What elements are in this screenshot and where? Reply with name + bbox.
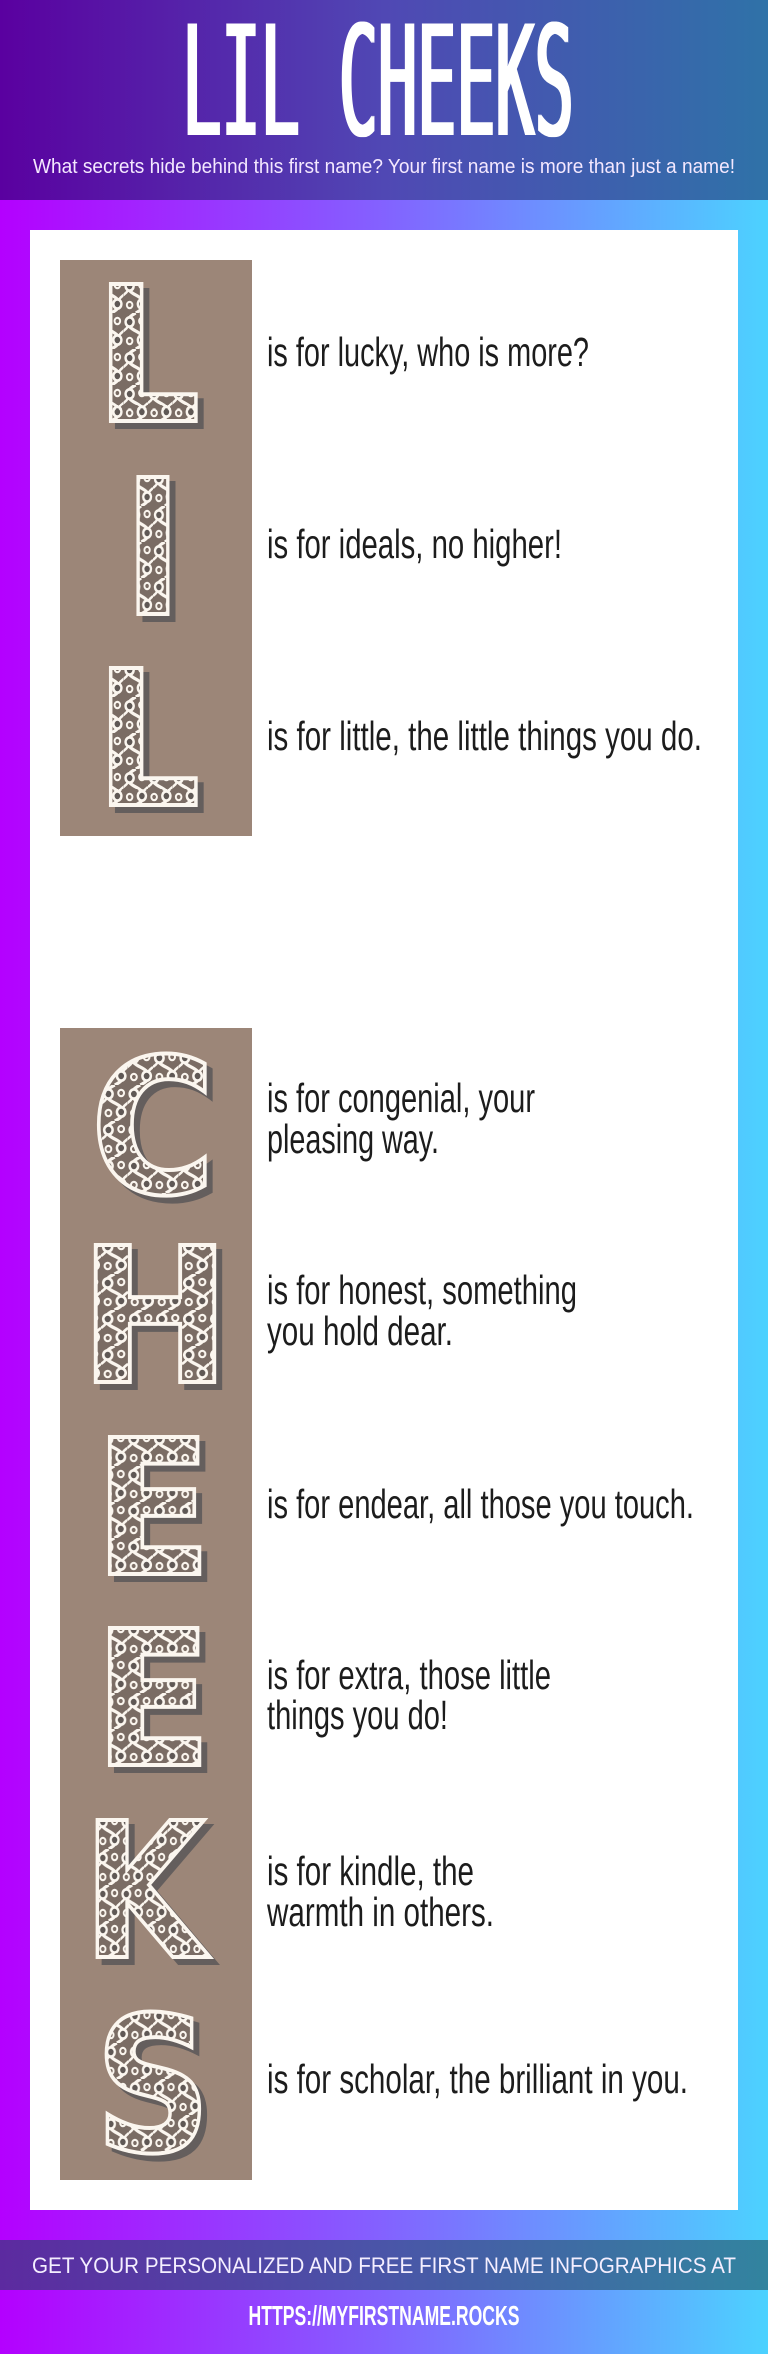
panel: second word CHEEKS: [60, 1019, 694, 2202]
subtitle: What secrets hide behind this first name? Your first name is more than just a name!: [33, 155, 735, 178]
footer url: HTTPS://MYFIRSTNAME.ROCKS: [248, 2300, 520, 2331]
line for K: kindle: [266, 1848, 494, 1935]
ornate letter C: C: [96, 1025, 222, 1244]
line for I: ideals: is for ideals, no higher!: [267, 521, 562, 567]
footer call-to-action band: GET YOUR PERSONALIZED AND FREE FIRST NAME INFOGRAPHICS AT: [32, 2253, 736, 2278]
ornate letter I: I: [130, 446, 188, 664]
header band: [0, 0, 768, 200]
line for H: honest: is for honest, something: [267, 1267, 577, 1313]
ornate letter L: L: [96, 246, 200, 466]
ornate letter K: K: [89, 1789, 216, 2007]
ornate letter H: H: [85, 1214, 237, 1433]
line for H: honest: you hold dear.: [267, 1308, 453, 1354]
ornate letter I: I: [124, 440, 182, 658]
line for C: congenial: is for congenial, your: [267, 1075, 535, 1121]
ornate letter H: H: [79, 1208, 231, 1427]
line for E: extra: [267, 1652, 551, 1738]
line for H: honest: [267, 1267, 577, 1354]
line for C: congenial: [267, 1075, 535, 1162]
line for E: extra: things you do!: [267, 1692, 448, 1738]
line for K: kindle: warmth in others.: [266, 1889, 494, 1935]
line for L: lucky: is for lucky, who is more?: [267, 329, 589, 375]
line for K: kindle: is for kindle, the: [267, 1848, 474, 1894]
ornate letter E: E: [94, 1399, 212, 1619]
footer call-to-action band: [0, 2240, 768, 2290]
ornate letter C: C: [90, 1019, 216, 1238]
line for E: extra: is for extra, those little: [267, 1652, 551, 1698]
ornate letter S: S: [101, 1983, 217, 2202]
white content panel: [30, 230, 738, 2210]
ornate letter E: E: [94, 1590, 212, 1810]
ornate letter E: E: [100, 1596, 218, 1816]
ornate letter S: S: [95, 1977, 211, 2196]
ornate letter E: E: [100, 1405, 218, 1625]
ornate letter L: L: [102, 636, 206, 856]
panel: first word LIL: [60, 246, 702, 856]
ornate letter L: L: [102, 252, 206, 472]
ornate letter L: L: [96, 630, 200, 850]
ornate letter K: K: [83, 1783, 210, 2001]
brown letter column: CHEEKS: [60, 1028, 252, 2180]
brown letter column: LIL: [60, 260, 252, 836]
line for C: congenial: pleasing way.: [267, 1116, 439, 1162]
